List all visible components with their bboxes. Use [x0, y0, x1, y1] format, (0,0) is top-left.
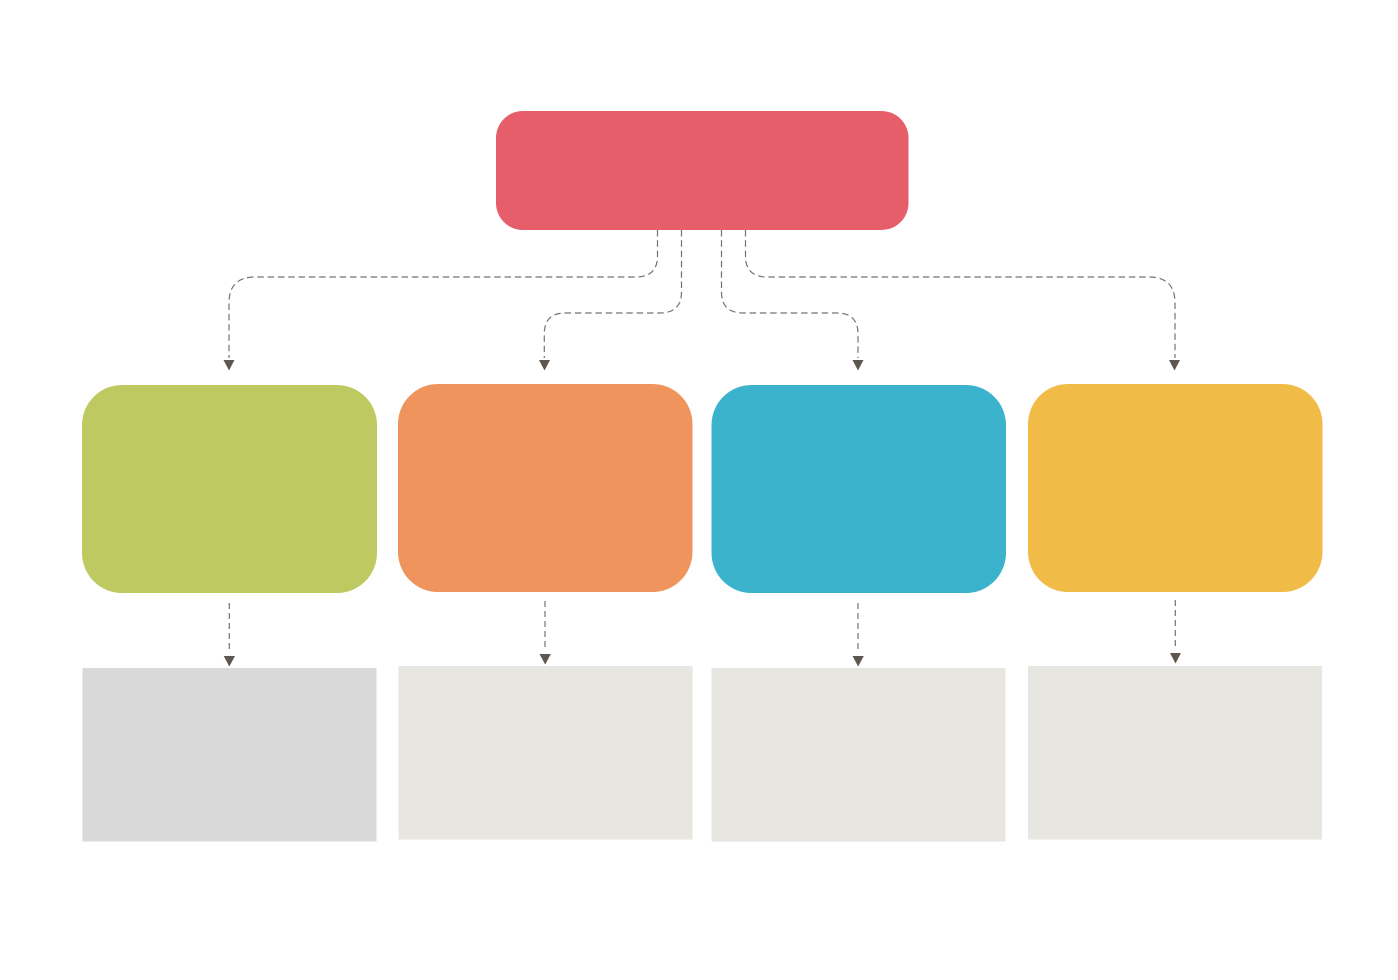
box: green [82, 385, 377, 593]
box: orange [398, 384, 692, 592]
panel: beige box two [398, 666, 692, 840]
arrowheads: row two [224, 653, 1181, 666]
top box: red [496, 111, 908, 230]
connectors: top box to coloured boxes [229, 230, 1175, 358]
panel: beige box three [712, 668, 1006, 842]
arrowheads: row one [224, 360, 1180, 370]
panel: beige box four [1028, 666, 1322, 840]
panel: grey box one [82, 668, 376, 842]
box: yellow [1028, 384, 1322, 592]
box: blue [712, 385, 1006, 593]
connectors: coloured boxes to grey boxes [229, 600, 1175, 652]
